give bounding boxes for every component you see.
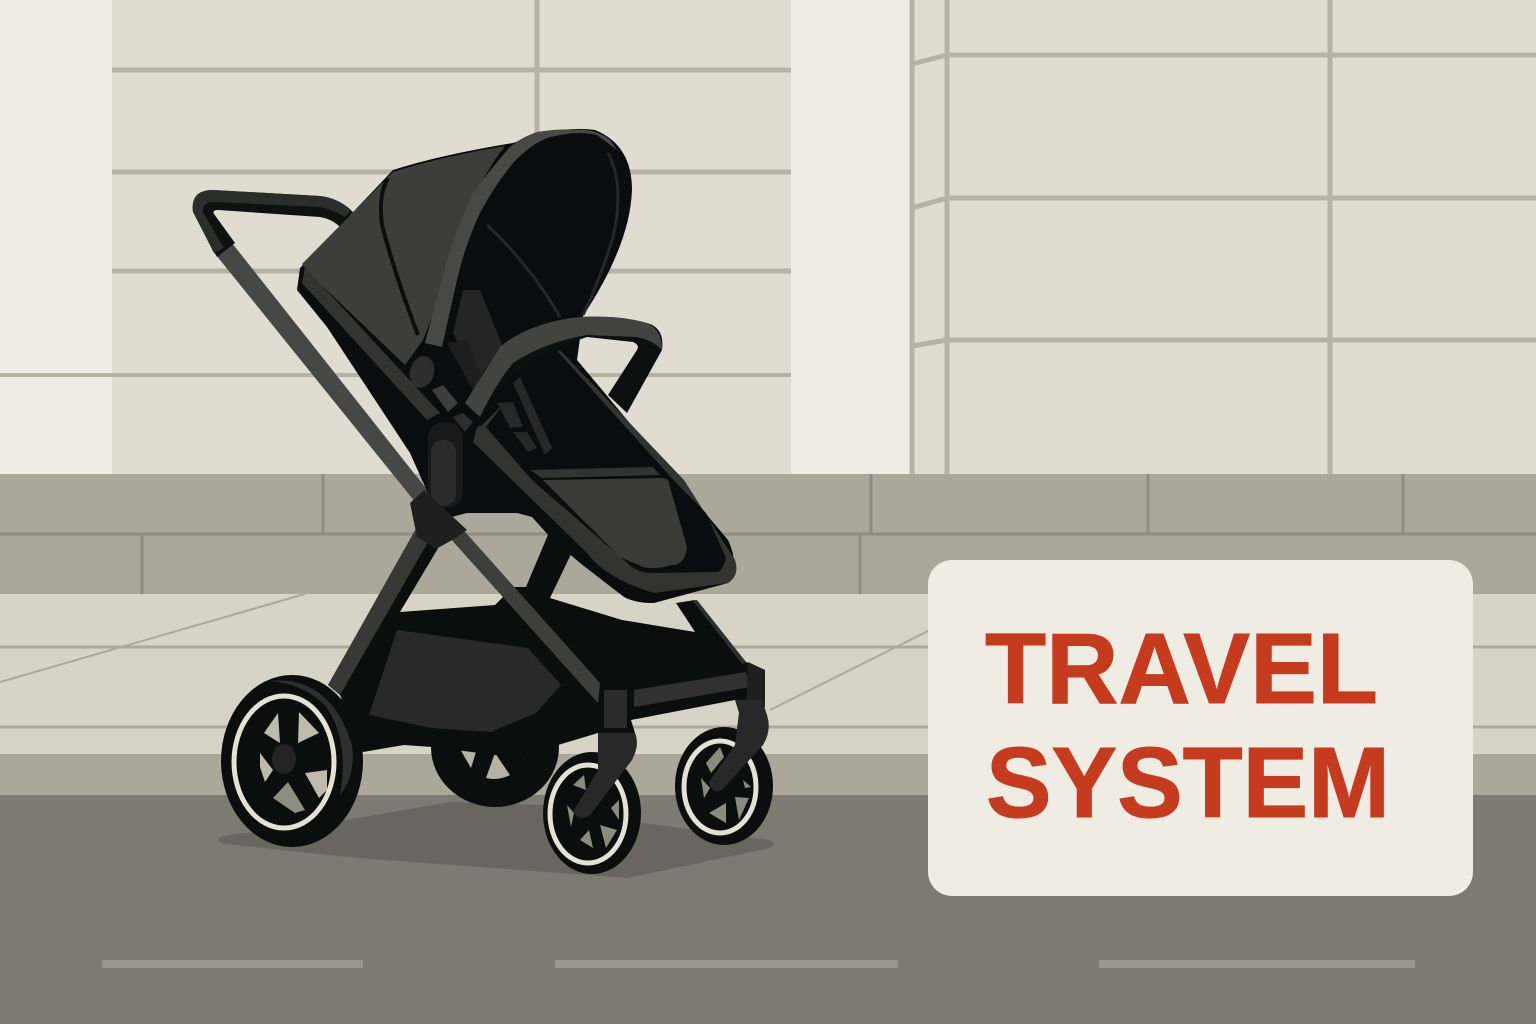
frame hinge (410, 490, 467, 549)
main diagonal leg (440, 515, 600, 703)
canopy side panel (302, 146, 505, 365)
push handle (193, 190, 353, 257)
canopy arc band (425, 129, 617, 347)
seat pivot (453, 413, 473, 432)
harness tab (432, 385, 458, 412)
thin tube highlight (693, 600, 746, 664)
stroller (193, 129, 773, 874)
basket and lower frame silhouette (328, 530, 765, 760)
background: pavement (0, 594, 1536, 795)
footrest panel (543, 478, 687, 568)
canopy lower brim (302, 267, 440, 420)
rear middle wheel (431, 687, 559, 807)
background: low stone wall (0, 474, 1536, 594)
seat outer rail (473, 350, 736, 593)
footrest top strip (530, 467, 660, 478)
rear left wheel (221, 675, 363, 847)
lower harness (497, 377, 552, 455)
left leg (328, 525, 432, 695)
label card (928, 560, 1473, 896)
front right wheel (675, 727, 773, 845)
shoulder pad (406, 353, 438, 391)
seat inner (486, 345, 726, 573)
background: building wall (0, 0, 1536, 474)
front left fork (573, 733, 637, 818)
canopy seam (381, 178, 418, 335)
background: road (0, 795, 1536, 1024)
frame joint capsule (428, 422, 463, 508)
front right fork (709, 700, 769, 791)
front left wheel (543, 752, 641, 874)
front cross bar (634, 672, 750, 707)
title line 2: SYSTEM (986, 727, 1390, 839)
canopy inner stripes (487, 153, 618, 317)
rear frame tube (212, 238, 432, 508)
arm bar (465, 317, 662, 417)
basket fabric panel (369, 630, 561, 732)
front block (604, 690, 627, 728)
stroller shadow (218, 802, 774, 878)
right corner block (746, 662, 765, 707)
seat headrest (453, 290, 503, 380)
seat and canopy silhouette (297, 129, 734, 603)
title: TRAVEL (985, 613, 1378, 725)
upper strut (526, 530, 572, 598)
harness strap (447, 340, 482, 390)
